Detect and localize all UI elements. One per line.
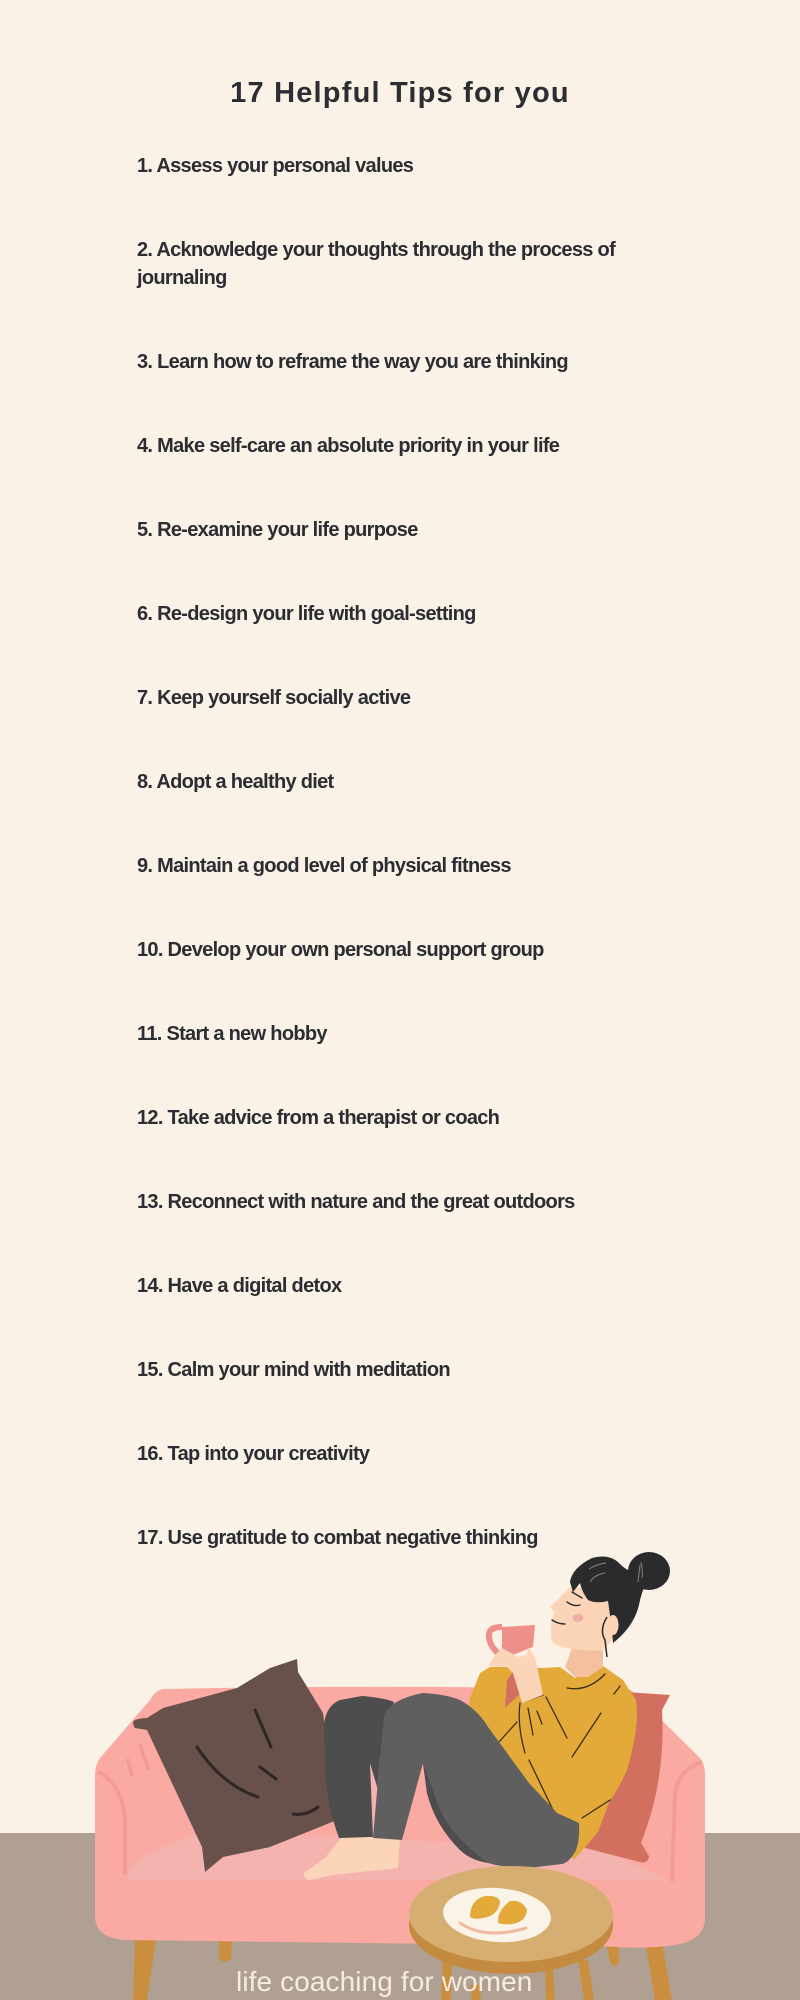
tip 16: 16. Tap into your creativity (137, 1443, 369, 1465)
tip 13: 13. Reconnect with nature and the great outdoors (137, 1191, 575, 1213)
sweater (468, 1666, 637, 1860)
sofa arm folds (100, 1745, 700, 1880)
face (550, 1587, 620, 1651)
pink gap between shins (370, 1763, 378, 1838)
tip 14: 14. Have a digital detox (137, 1275, 341, 1297)
eye and smile (552, 1592, 582, 1624)
floor (0, 1833, 800, 2000)
tip 15: 15. Calm your mind with meditation (137, 1359, 450, 1381)
hands (488, 1647, 543, 1703)
mug (489, 1625, 535, 1656)
tip 9: 9. Maintain a good level of physical fitness (137, 855, 511, 877)
feet (304, 1836, 400, 1880)
table (409, 1866, 613, 1974)
pillow: red (585, 1692, 670, 1862)
leg: front (373, 1693, 579, 1868)
sweater fold lines (498, 1674, 620, 1818)
leg: back (324, 1696, 394, 1838)
tip 4: 4. Make self-care an absolute priority in your life (137, 435, 559, 457)
plate (441, 1884, 553, 1946)
tip 7: 7. Keep yourself socially active (137, 687, 410, 709)
tip 6: 6. Re-design your life with goal-setting (137, 603, 476, 625)
title: 17 Helpful Tips for you (230, 77, 570, 109)
sofa seat (128, 1832, 668, 1880)
tip 10: 10. Develop your own personal support group (137, 939, 544, 961)
tip 12: 12. Take advice from a therapist or coach (137, 1107, 499, 1129)
tip 1: 1. Assess your personal values (137, 155, 413, 177)
pillow: red sliver behind arm (505, 1672, 524, 1708)
tip 8: 8. Adopt a healthy diet (137, 771, 334, 793)
neck (565, 1648, 603, 1677)
footer tagline: life coaching for women (236, 1966, 532, 1997)
table legs (441, 1955, 594, 2000)
tip 3: 3. Learn how to reframe the way you are thinking (137, 351, 568, 373)
sofa (95, 1687, 705, 1948)
pillow: brown (133, 1659, 337, 1872)
cookies (470, 1896, 500, 1919)
sofa legs (133, 1940, 672, 2000)
sauce (460, 1923, 526, 1933)
ear (608, 1615, 618, 1635)
tip 2: 2. Acknowledge your thoughts through the process of journaling (137, 239, 615, 289)
hair and bun (570, 1552, 670, 1657)
cheek (572, 1614, 584, 1622)
tip 17: 17. Use gratitude to combat negative thinking (137, 1527, 538, 1549)
tip 11: 11. Start a new hobby (137, 1023, 327, 1045)
tip 5: 5. Re-examine your life purpose (137, 519, 418, 541)
